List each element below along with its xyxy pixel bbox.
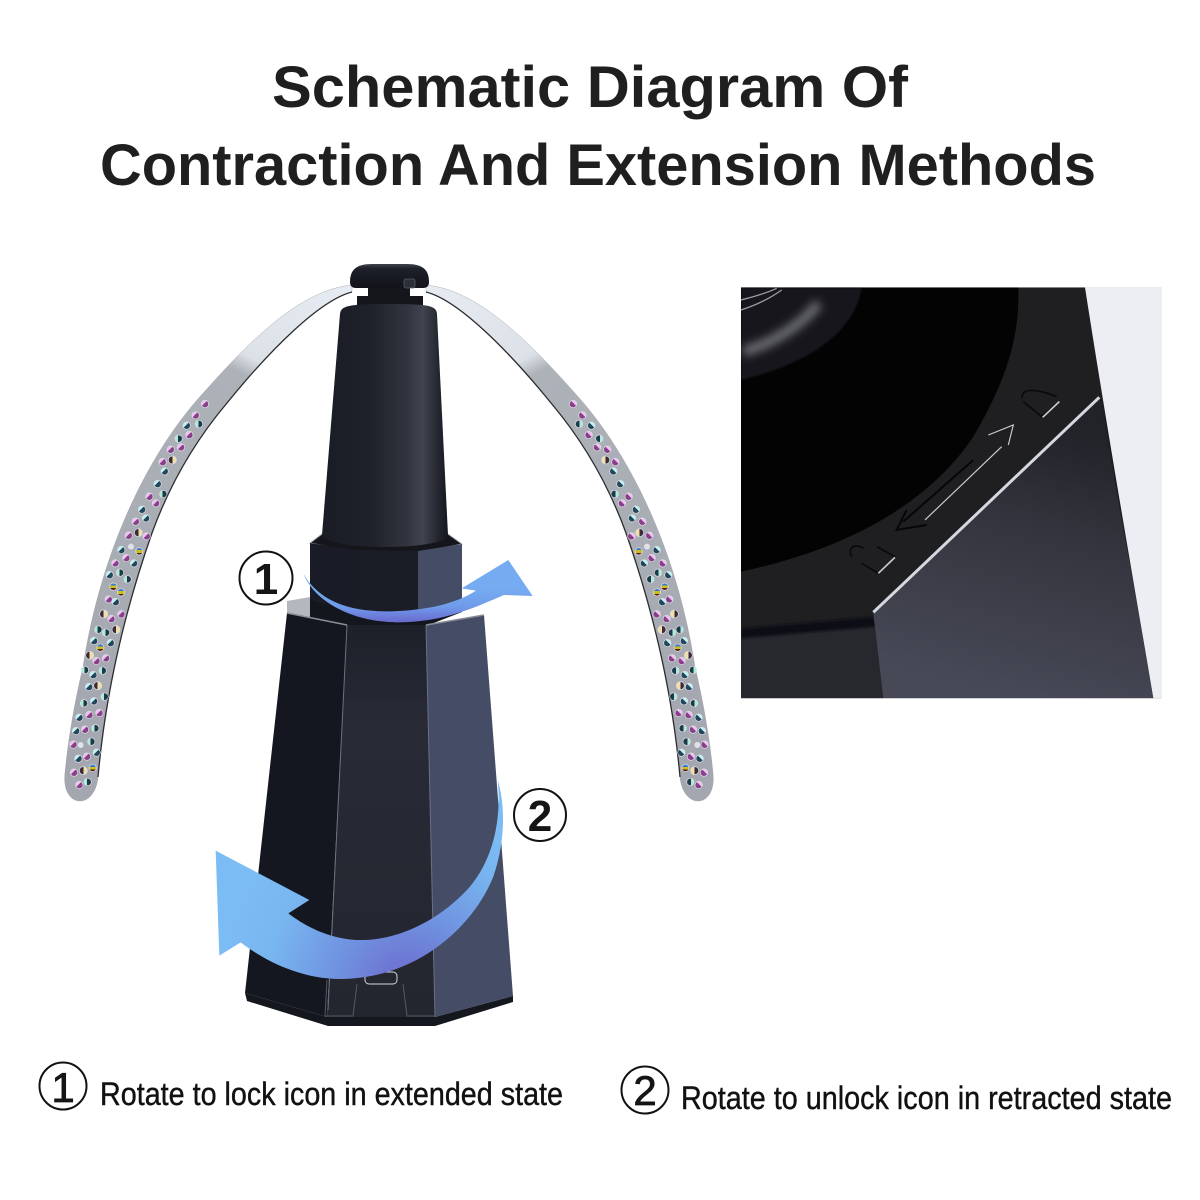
- caption 1: [40, 1062, 563, 1112]
- black cavity: [741, 287, 1018, 572]
- step marker 2 on diagram: [514, 789, 566, 841]
- caption 1: 1: [51, 1064, 75, 1111]
- right perforated arm: [426, 285, 713, 801]
- product diagram: [65, 264, 713, 1026]
- caption 1: Rotate to lock icon in extended state: [100, 1076, 563, 1112]
- rotating collar: [310, 543, 462, 612]
- rotation arrow 1: [303, 560, 533, 622]
- title: [100, 55, 1096, 198]
- caption 2: 2: [633, 1067, 657, 1114]
- device cap: [350, 264, 429, 288]
- USB-C port: [325, 972, 435, 1016]
- left perforated arm: [65, 285, 352, 801]
- title: Schematic Diagram Of: [272, 55, 909, 120]
- base body: [245, 613, 513, 1026]
- embossed double arrow: [897, 425, 1013, 530]
- inner cone highlight: [741, 287, 862, 380]
- caption 2: [622, 1066, 1172, 1116]
- under-collar shadow: [310, 598, 462, 626]
- lower-left face: [741, 628, 884, 698]
- embossed open lock icon: [850, 546, 895, 573]
- device neck: [357, 287, 423, 306]
- device cone: [322, 304, 448, 547]
- title: Contraction And Extension Methods: [100, 133, 1096, 198]
- lower-right face: [873, 434, 1154, 698]
- bright edge: [873, 397, 1099, 612]
- base shoulder: [287, 597, 310, 618]
- detail photo: lock icons on collar: [741, 287, 1162, 698]
- rotation arrow 2: [216, 780, 503, 979]
- step marker 1 on diagram: [240, 552, 292, 604]
- step marker 1 on diagram: 1: [254, 555, 278, 604]
- step marker 2 on diagram: 2: [528, 792, 552, 841]
- embossed closed lock icon: [1022, 390, 1059, 417]
- collar top rim: [310, 534, 462, 553]
- white background edge: [1085, 287, 1162, 698]
